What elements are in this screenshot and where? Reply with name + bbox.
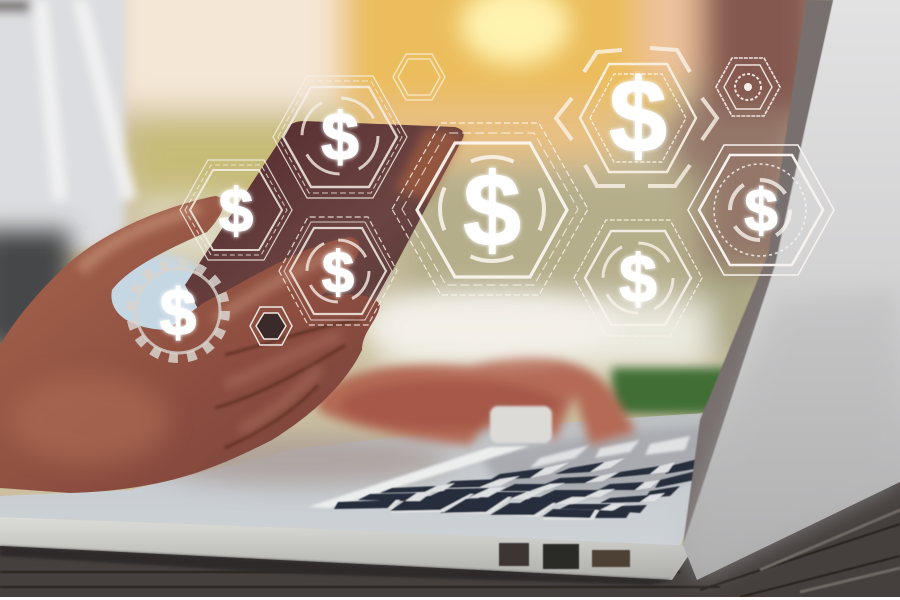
icon: right hexagon dollar: $ — [744, 177, 778, 244]
icon: bottom center-right hexagon dollar: $ — [619, 241, 657, 317]
icon: gear with dollar — [131, 264, 225, 358]
laptop base — [0, 412, 720, 585]
table — [0, 482, 900, 600]
icon: phone hexagon dollar — [273, 76, 407, 198]
laptop screen lid — [683, 0, 900, 580]
icon: large center hexagon dollar: $ — [463, 153, 521, 269]
icon: large center hexagon dollar — [392, 123, 588, 295]
holding hand — [0, 196, 380, 493]
icon: lower phone hexagon dollar: $ — [322, 240, 354, 305]
keyboard — [308, 425, 708, 520]
laptop deck — [0, 412, 720, 546]
smartphone — [185, 121, 464, 358]
icon: top left hexagon dollar: $ — [219, 177, 253, 246]
white haze over the desk — [360, 293, 620, 357]
laptop front edge — [0, 517, 695, 580]
icon: lower phone hexagon dollar — [279, 217, 397, 325]
icon: top left hexagon dollar — [180, 160, 292, 260]
icon: bottom center-right hexagon dollar — [574, 220, 702, 336]
icon: small outline hexagon top — [393, 54, 445, 100]
typing hand — [318, 356, 636, 445]
ports — [499, 543, 630, 569]
icon: top right hexagon dollar: $ — [609, 59, 667, 175]
icon: top right hexagon dollar — [556, 48, 717, 186]
icon: phone hexagon dollar: $ — [321, 99, 359, 175]
icon: right hexagon dollar — [688, 145, 834, 275]
icon: concentric hexagon upper right — [716, 58, 780, 116]
icon: gear with dollar: $ — [160, 275, 196, 349]
icon: small dark hexagon — [250, 307, 292, 345]
